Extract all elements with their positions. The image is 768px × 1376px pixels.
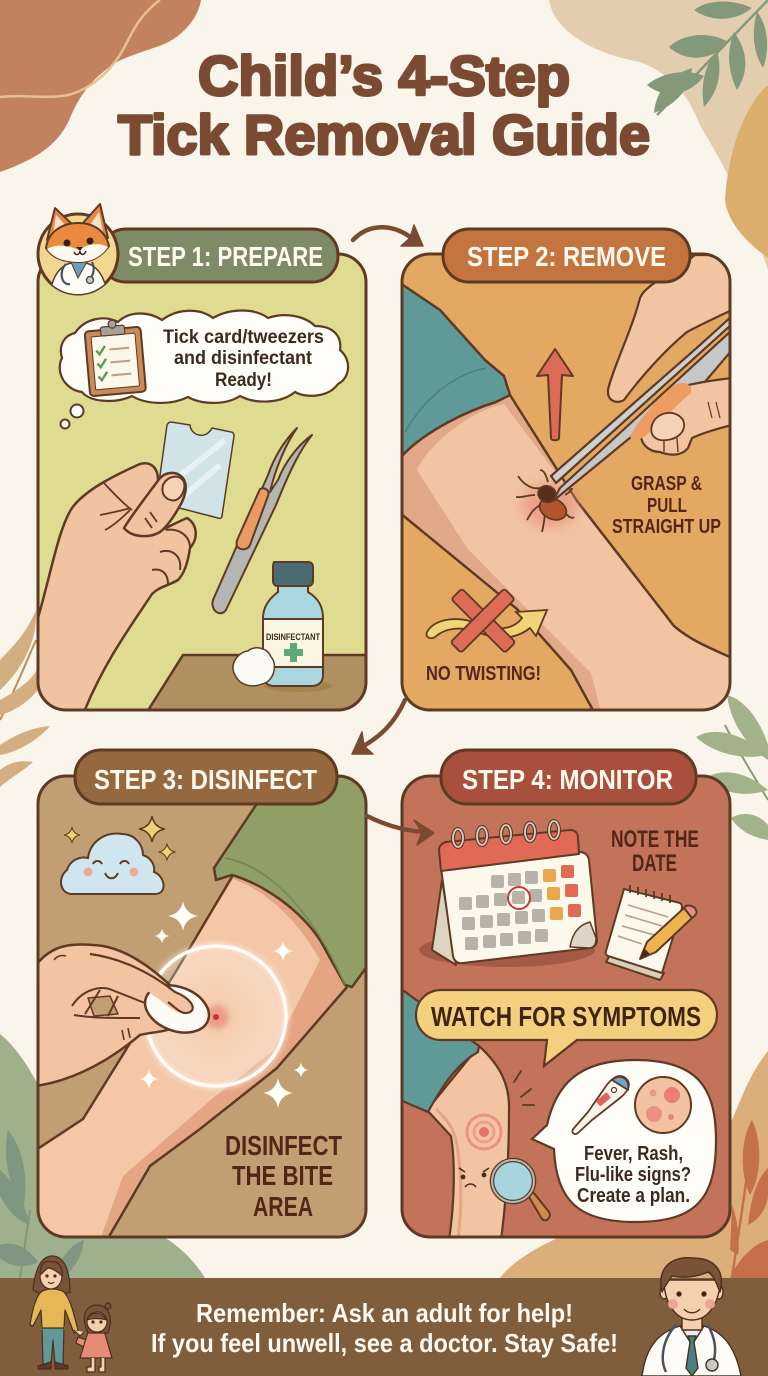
tick	[516, 470, 578, 532]
callout: watch for symptoms: WATCH FOR SYMPTOMS	[431, 1001, 701, 1032]
leaves: top right branch	[647, 0, 768, 115]
cloud text: Ready!	[215, 370, 272, 391]
text: no twisting: NO TWISTING!	[426, 663, 541, 685]
callout: watch for symptoms	[416, 990, 717, 1066]
cloud text: Tick card/tweezers	[163, 327, 324, 348]
arrow: step 3 to step 4	[367, 816, 434, 845]
title: Tick Removal Guide	[118, 103, 650, 166]
icon: fox doctor badge	[38, 204, 118, 296]
bite mark	[205, 1005, 229, 1029]
icon: happy cloud	[61, 834, 164, 894]
text: grasp and pull: STRAIGHT UP	[612, 516, 721, 538]
table	[147, 655, 368, 712]
bubble text	[575, 1143, 691, 1207]
bubble text: Create a plan.	[577, 1185, 690, 1207]
text: disinfect the bite area: DISINFECT	[225, 1130, 342, 1161]
text: grasp and pull	[612, 473, 721, 538]
leaves: left middle tan branch	[0, 610, 50, 787]
tweezers	[212, 428, 312, 613]
icon: clipboard checklist	[84, 318, 146, 396]
background blob: top left terracotta	[0, 0, 201, 172]
text: grasp and pull: PULL	[647, 495, 687, 517]
thought cloud	[60, 310, 348, 428]
thought bubbles	[60, 404, 84, 428]
arm	[404, 394, 728, 708]
text: note the date	[611, 826, 699, 877]
arm with rash	[400, 988, 509, 1240]
bullseye rash	[467, 1115, 501, 1149]
text: note the date: DATE	[632, 850, 677, 877]
icon: desk calendar	[419, 821, 597, 967]
magnifier	[492, 1160, 550, 1220]
cloud text	[163, 327, 324, 391]
heading pill: step 3: STEP 3: DISINFECT	[94, 764, 317, 795]
title	[118, 44, 650, 166]
bubble text: Fever, Rash,	[584, 1143, 683, 1165]
hand with tweezers	[551, 255, 732, 501]
background blob: bottom right tan with terracotta leaves	[500, 1051, 768, 1278]
icon: notepad and pencil	[606, 885, 697, 980]
icon: gold stars	[64, 816, 176, 860]
arm	[36, 875, 347, 1240]
panel: step 3 disinfect	[36, 770, 368, 1240]
heading pill: step 4: STEP 4: MONITOR	[462, 764, 673, 795]
text: disinfect the bite area	[225, 1130, 342, 1222]
up arrow	[537, 349, 573, 440]
footer text	[151, 1298, 618, 1358]
panel: step 1 prepare	[36, 254, 368, 712]
icon: parent and child	[30, 1256, 112, 1372]
title: Child’s 4-Step	[198, 44, 570, 107]
icon: doctor	[642, 1258, 741, 1376]
disinfectant bottle: DISINFECTANT	[266, 632, 320, 643]
sleeve	[400, 283, 510, 458]
icon: thermometer	[572, 1076, 629, 1134]
arrow: step 2 to step 3	[352, 700, 405, 754]
footer text: Remember: Ask an adult for help!	[196, 1298, 573, 1328]
icon: rash skin circle	[635, 1077, 691, 1133]
hand with cotton pad	[36, 944, 216, 1086]
hand holding card	[36, 463, 196, 712]
heading pill: step 2: STEP 2: REMOVE	[467, 241, 666, 272]
heading pill: step 2	[443, 229, 690, 282]
arrow: step 1 to step 2	[353, 225, 423, 246]
text: note the date: NOTE THE	[611, 826, 699, 853]
background blob: top right tan and gold	[549, 0, 768, 270]
sparkles	[140, 901, 308, 1108]
callout: symptoms bubble	[532, 1060, 716, 1222]
cotton ball	[233, 648, 274, 686]
disinfectant bottle	[263, 562, 332, 692]
text: disinfect the bite area: THE BITE	[232, 1160, 333, 1191]
tick card	[157, 422, 234, 518]
bubble text: Flu-like signs?	[575, 1164, 691, 1186]
no twisting warning	[427, 588, 547, 654]
sad face on skin	[459, 1168, 489, 1187]
panel: step 2 remove	[400, 254, 732, 712]
cloud text: and disinfectant	[174, 348, 313, 369]
heading pill: step 1	[100, 229, 338, 282]
leaves: right middle green branch	[696, 695, 768, 840]
heading pill: step 3	[75, 750, 337, 804]
motion lines	[514, 1071, 534, 1105]
footer text: If you feel unwell, see a doctor. Stay Safe!	[151, 1328, 618, 1358]
heading pill: step 1: STEP 1: PREPARE	[128, 241, 323, 272]
text: disinfect the bite area: AREA	[253, 1191, 313, 1222]
glow ring around bite	[146, 946, 286, 1086]
background blob: bottom left green	[0, 1034, 205, 1278]
sleeve	[214, 770, 368, 987]
text: grasp and pull: GRASP &	[631, 473, 702, 495]
footer band	[0, 1278, 768, 1376]
panel: step 4 monitor	[400, 776, 730, 1240]
heading pill: step 4	[441, 750, 696, 804]
